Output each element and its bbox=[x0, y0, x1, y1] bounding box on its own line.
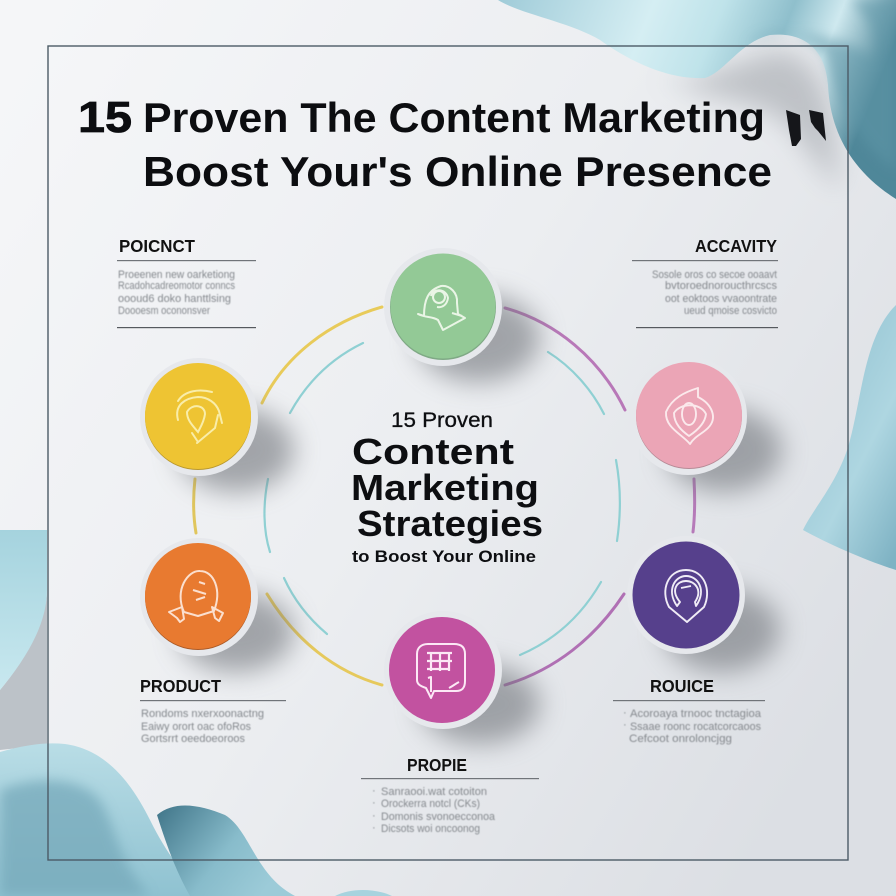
text: PROPIE body: · bbox=[372, 797, 376, 809]
text: ACCAVITY body: Sosole oros co secoe ooaavt bbox=[652, 269, 777, 281]
badge: magenta bbox=[384, 611, 540, 744]
icon: orange rosette bbox=[169, 571, 223, 622]
icon: purple pin bbox=[665, 570, 707, 622]
text: PROPIE body bbox=[372, 785, 496, 835]
title bbox=[78, 93, 772, 195]
badge: yellow bbox=[140, 358, 294, 492]
text: POICNCT body bbox=[118, 269, 235, 317]
rule: POICNCT bottom bbox=[117, 327, 256, 328]
icon: decorative title glyphs bbox=[786, 110, 826, 146]
text: ACCAVITY body bbox=[652, 269, 778, 317]
title: Proven The Content Marketing bbox=[143, 94, 765, 141]
panel: PRODUCT bbox=[140, 676, 286, 745]
badge: pink bbox=[629, 357, 782, 492]
text: PRODUCT body: Gortsrrt oeedoeoroos bbox=[141, 733, 245, 745]
text: PROPIE body: · bbox=[372, 810, 376, 822]
center text: to Boost Your Online bbox=[352, 547, 536, 566]
text: PROPIE body: Domonis svonoecconoa bbox=[381, 811, 496, 823]
text: POICNCT body: Proeenen new oarketiong bbox=[118, 269, 235, 281]
icon: yellow rose bbox=[177, 391, 222, 443]
text: PRODUCT body: Rondoms nxerxoonactng bbox=[141, 708, 264, 720]
text: ACCAVITY body: ueud qmoise cosvicto bbox=[684, 305, 777, 317]
text: PROPIE body: Sanraooi.wat cotoiton bbox=[381, 786, 487, 798]
text: ROUICE body bbox=[623, 707, 762, 745]
panel: POICNCT: POICNCT bbox=[119, 236, 195, 256]
ribbon: bottom left bbox=[0, 743, 392, 896]
center text: 15 Proven bbox=[391, 409, 493, 432]
title: 15 bbox=[78, 93, 132, 142]
text: PROPIE body: Dicsots woi oncoonog bbox=[381, 823, 480, 835]
panel: ROUICE bbox=[613, 676, 765, 745]
panel: PROPIE: PROPIE bbox=[407, 755, 467, 775]
panel: ACCAVITY bbox=[632, 236, 778, 317]
text: POICNCT body: Rcadohcadreomotor conncs bbox=[118, 280, 235, 292]
text: ROUICE body: Acoroaya trnooc tnctagioa bbox=[630, 708, 762, 720]
panel: PROPIE bbox=[361, 755, 539, 835]
title: Boost Your's Online Presence bbox=[143, 148, 772, 195]
rule: ACCAVITY bottom bbox=[636, 327, 778, 328]
panel: ACCAVITY: ACCAVITY bbox=[695, 236, 777, 256]
center text bbox=[351, 409, 543, 566]
center text: Strategies bbox=[357, 503, 543, 544]
text: ROUICE body: Cefcoot onroloncjgg bbox=[629, 733, 732, 745]
text: POICNCT body: Doooesm ocononsver bbox=[118, 305, 210, 317]
center text: Marketing bbox=[351, 467, 539, 508]
badge: orange bbox=[140, 538, 294, 672]
ribbon: right bbox=[803, 305, 896, 570]
badge: purple bbox=[627, 536, 780, 672]
icon: pink eye bbox=[666, 388, 713, 444]
panel: PRODUCT: PRODUCT bbox=[140, 676, 221, 696]
ribbon: left bbox=[0, 530, 47, 750]
ribbon: top right bbox=[498, 0, 896, 199]
text: PROPIE body: Orockerra notcl (CKs) bbox=[381, 798, 480, 810]
text: PROPIE body: · bbox=[372, 822, 376, 834]
text: ROUICE body: Ssaae roonc rocatcorcaoos bbox=[630, 721, 761, 733]
text: ACCAVITY body: oot eoktoos vvaoontrate bbox=[665, 293, 777, 305]
connector ring bbox=[194, 307, 695, 685]
panel: POICNCT bbox=[117, 236, 256, 317]
icon: chat grid bbox=[417, 644, 465, 698]
text: PROPIE body: · bbox=[372, 785, 376, 797]
panel: ROUICE: ROUICE bbox=[650, 676, 714, 696]
text: PRODUCT body bbox=[141, 708, 264, 745]
center text: Content bbox=[352, 431, 514, 472]
text: ROUICE body: · bbox=[623, 719, 627, 731]
text: POICNCT body: oooud6 doko hanttlsing bbox=[118, 293, 231, 305]
text: ACCAVITY body: bvtoroednoroucthrcscs bbox=[665, 280, 778, 292]
text: PRODUCT body: Eaiwy orort oac ofoRos bbox=[141, 721, 251, 733]
text: ROUICE body: · bbox=[623, 707, 627, 719]
icon: green head bbox=[418, 286, 465, 330]
badge: green bbox=[384, 248, 540, 382]
